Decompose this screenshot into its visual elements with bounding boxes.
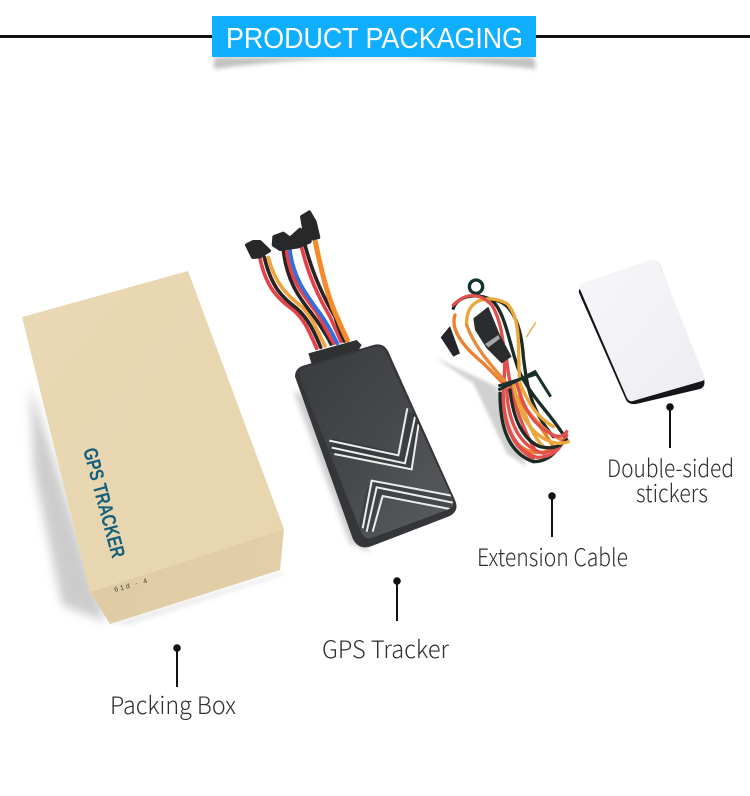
callout: extension cable [477, 492, 628, 573]
tracker top face [299, 347, 454, 538]
tracker connectors [247, 212, 319, 257]
sticker backing [579, 260, 704, 404]
cable tie [498, 372, 551, 397]
box shadow [30, 385, 106, 622]
marker [666, 403, 674, 448]
device shadow [293, 390, 370, 552]
label: GPS Tracker [322, 630, 449, 665]
label: Extension Cable [477, 538, 628, 573]
tracker strain relief [308, 340, 362, 364]
cable shadow [433, 357, 527, 467]
packing box [22, 271, 284, 625]
box label: GPS TRACKER [78, 446, 129, 561]
ring terminal [469, 280, 483, 293]
box top face [22, 271, 284, 592]
marker [173, 644, 181, 687]
label: Packing Box [110, 686, 236, 721]
callout: GPS tracker [322, 577, 449, 665]
title: PRODUCT PACKAGING [226, 23, 523, 55]
cable connector [441, 326, 460, 357]
callout: packing box [110, 644, 236, 721]
label line 2: stickers [636, 474, 708, 509]
tracker body [295, 344, 456, 547]
GPS tracker device [247, 212, 456, 552]
cable bundle [453, 296, 568, 462]
section header [0, 16, 750, 69]
box front face [90, 529, 284, 624]
label: Double-sided [607, 449, 734, 484]
callout: stickers [607, 403, 734, 509]
marker [393, 577, 401, 621]
box stamp: 61d - 4 [114, 578, 148, 594]
marker [548, 492, 556, 537]
tracker wires [260, 242, 347, 348]
extension cable [433, 280, 568, 467]
tracker chevrons [329, 408, 453, 532]
banner shadow [214, 57, 536, 69]
double-sided sticker [579, 260, 705, 404]
sticker face [579, 260, 705, 401]
title banner [212, 16, 536, 57]
fuse holder [473, 307, 512, 363]
